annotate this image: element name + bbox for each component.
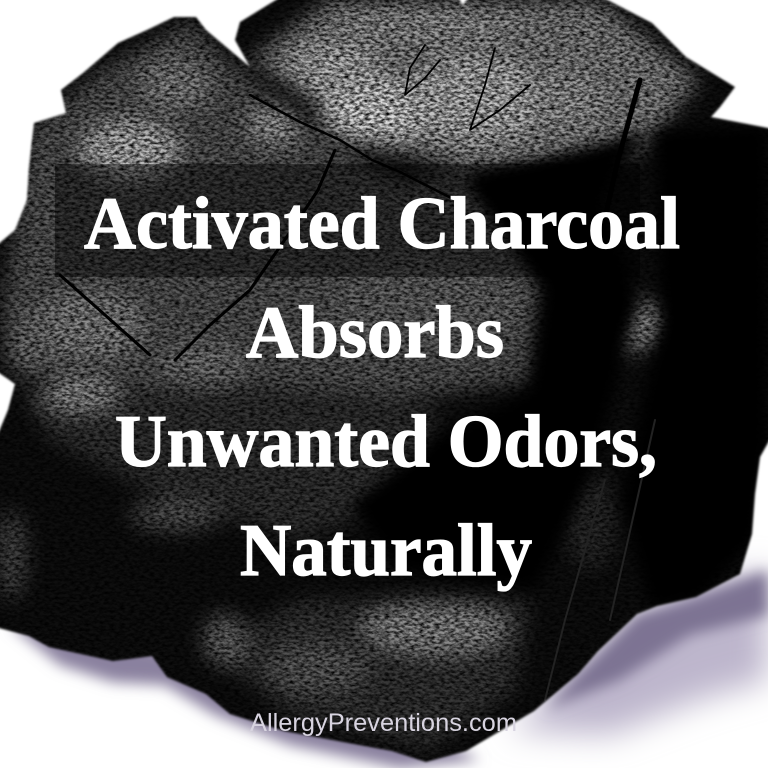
translucent text band [55, 164, 640, 277]
cracks [60, 45, 655, 700]
headline line 4: Naturally [240, 510, 532, 592]
headline line 1: Activated Charcoal [84, 183, 680, 265]
cast shadow [10, 570, 768, 768]
headline line 2: Absorbs [246, 292, 504, 374]
headline [84, 183, 680, 592]
headline line 3: Unwanted Odors, [115, 401, 657, 483]
website credit: AllergyPreventions.com [250, 709, 517, 737]
dark wedges [350, 125, 768, 610]
